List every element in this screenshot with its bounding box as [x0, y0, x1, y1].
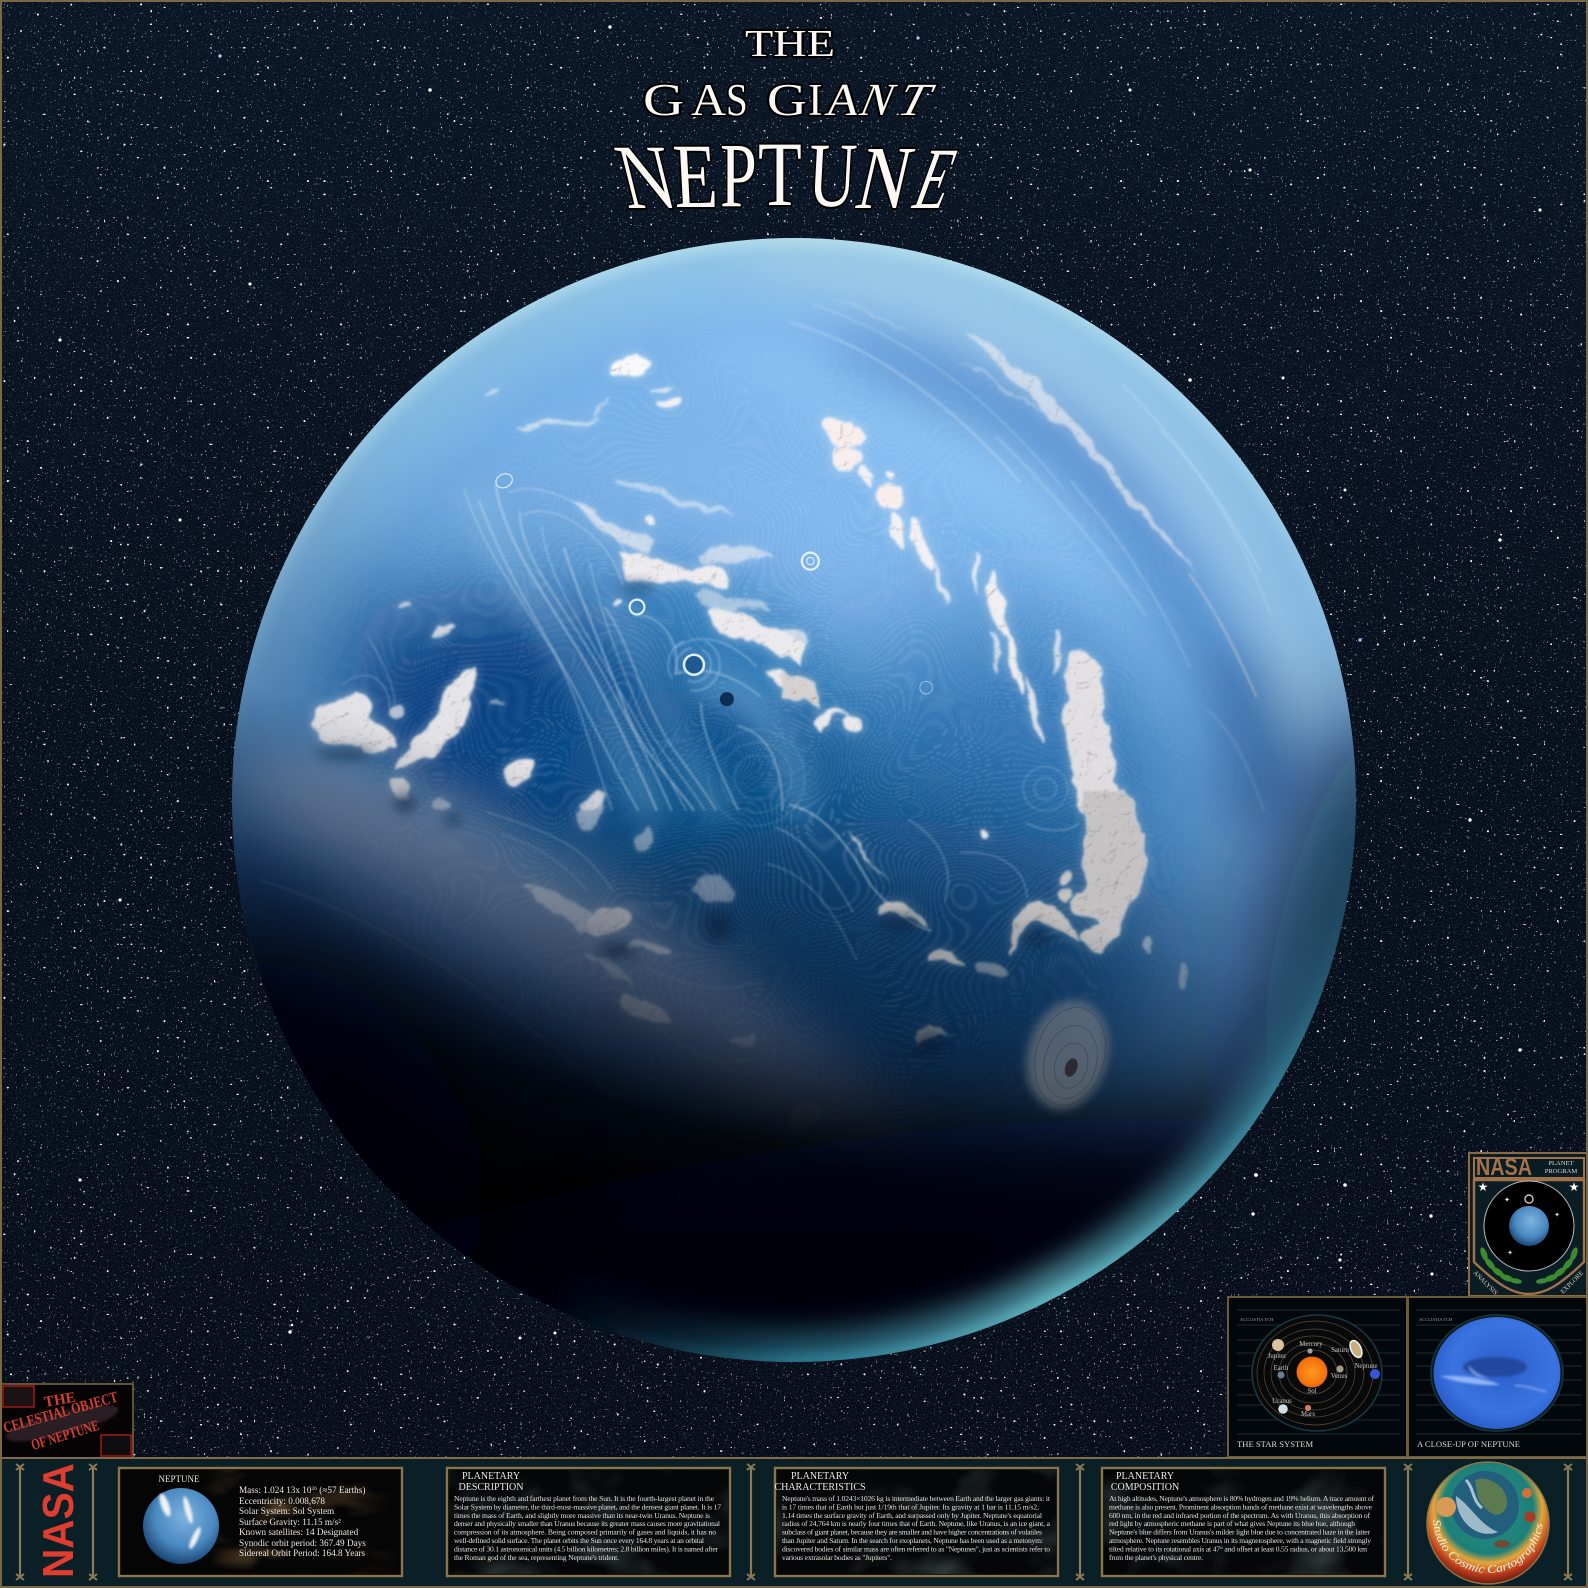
- badge header: NASA planet program: NASA: [1476, 1154, 1532, 1181]
- white cloud formations: [309, 295, 1201, 1127]
- celestial object badge: OF NEPTUNE: [29, 1418, 101, 1454]
- celestial object badge: CELESTIAL OBJECT: [2, 1389, 120, 1437]
- solar system diagram: Sol: [1307, 1388, 1317, 1395]
- Studio Cosmic Cartographics seal: [1426, 1461, 1550, 1585]
- caption: the star system: THE STAR SYSTEM: [1237, 1439, 1314, 1449]
- body text: distance of 30.1 astronomical units (4.5 billion kilometres; 2.8 billion miles). It is named after: [454, 1544, 718, 1553]
- solar system diagram: Jupiter: [1268, 1353, 1287, 1360]
- badge circle with mini planet: [1478, 1180, 1579, 1271]
- heading: COMPOSITION: [1111, 1482, 1179, 1493]
- title line: NEPTUNE: T: [758, 122, 802, 225]
- panel: the star system: [1228, 1297, 1407, 1457]
- badge circle with mini planet: ★: [1569, 1180, 1579, 1194]
- badge captions: EXPLORE: [1559, 1270, 1585, 1295]
- badge laurel: [1479, 1246, 1579, 1285]
- heading: CHARACTERISTICS: [774, 1482, 866, 1493]
- solar system diagram: [1252, 1315, 1382, 1431]
- badge circle with mini planet: ✦: [1554, 1211, 1560, 1219]
- cyclone storm lower right: [1015, 991, 1120, 1119]
- body text: [1109, 1494, 1374, 1562]
- title line: NEPTUNE: U: [806, 126, 859, 227]
- solar system diagram: Venus: [1331, 1373, 1348, 1380]
- body text: 600 nm, in the red and infrared portion of the spectrum. As with Uranus, this absorption of: [1109, 1511, 1370, 1520]
- Studio Cosmic Cartographics seal: Studio Cosmic Cartographics: [1433, 1520, 1542, 1573]
- body text: subclass of giant planet, because they are smaller and have higher concentrations of volatiles: [782, 1528, 1042, 1537]
- body text: tilted relative to its rotational axis at 47° and offset at least 0.55 radius, or about 13,500 km: [1109, 1544, 1367, 1553]
- panel: close-up of Neptune: [1408, 1297, 1587, 1457]
- facts list: Surface Gravity: 11.15 m/s²: [239, 1517, 341, 1527]
- solar system diagram: Saturn: [1331, 1347, 1349, 1354]
- heading: [1111, 1471, 1179, 1493]
- badge circle with mini planet: ✦: [1507, 1249, 1513, 1257]
- panel: close-up of Neptune: ACCLISTIA TCH: [1419, 1317, 1453, 1322]
- badge captions: [1472, 1269, 1585, 1297]
- heading: [774, 1471, 866, 1493]
- title line: NEPTUNE: N: [848, 128, 922, 228]
- panel: planetary composition: [1102, 1468, 1385, 1576]
- body text: times the mass of Earth, and slightly more massive than its near-twin Uranus. Neptune is: [454, 1511, 710, 1520]
- title line: GAS GIANT: I: [808, 74, 823, 125]
- heading: [458, 1471, 524, 1493]
- title line: GAS GIANT: A: [823, 75, 864, 126]
- badge header: NASA planet program: PROGRAM: [1545, 1168, 1577, 1175]
- planet base sphere: [232, 238, 1356, 1362]
- deep blue central storm region: [301, 255, 1200, 1197]
- grey terminator band lower left: [200, 759, 920, 1290]
- banded upper-right atmosphere: [679, 252, 1323, 822]
- caption: a close-up of Neptune: A CLOSE-UP OF NEPTUNE: [1417, 1439, 1520, 1449]
- heading: PLANETARY: [1116, 1471, 1174, 1482]
- heading: DESCRIPTION: [458, 1482, 524, 1493]
- soft light current bands: [475, 496, 800, 810]
- body text: red light by atmospheric methane is part of what gives Neptune its blue hue, although: [1109, 1519, 1355, 1528]
- solar system diagram: Earth: [1274, 1365, 1289, 1372]
- panel: planetary characteristics: [774, 1468, 1058, 1576]
- bottom information bar: [2, 1457, 1586, 1586]
- ornamental dividers: [16, 1464, 1572, 1580]
- facts list: Sidereal Orbit Period: 164.8 Years: [239, 1548, 365, 1558]
- badge circle with mini planet: ✦: [1504, 1196, 1510, 1204]
- celestial object badge: [1, 1384, 133, 1458]
- solar system diagram: Mercury: [1299, 1341, 1323, 1348]
- body text: Neptune's mass of 1.0243×1026 kg is intermediate between Earth and the larger gas giants: it: [782, 1494, 1051, 1503]
- body text: Neptune's blue differs from Uranus's milder light blue due to concentrated haze in the latter: [1109, 1528, 1370, 1537]
- close-up planet image: [1431, 1315, 1563, 1431]
- title line: GAS GIANT: S: [726, 75, 748, 126]
- atmospheric flow lines: [352, 372, 1171, 1066]
- pale upper limb glow: [232, 238, 1356, 1362]
- body text: [454, 1494, 721, 1562]
- heading: PLANETARY: [462, 1471, 520, 1482]
- facts planet thumbnail: [143, 1488, 219, 1564]
- facts list: Solar System: Sol System: [239, 1506, 334, 1516]
- NASA logo: NASA: [34, 1463, 83, 1578]
- panel: Neptune facts: NEPTUNE: [158, 1474, 200, 1484]
- solar system diagram: Mars: [1301, 1411, 1315, 1418]
- badge circle with mini planet: ★: [1478, 1180, 1488, 1194]
- body text: various extrasolar bodies as "Jupiters".: [782, 1553, 892, 1562]
- title line: GAS GIANT: T: [888, 74, 942, 125]
- body text: from the planet's physical centre.: [1109, 1553, 1203, 1562]
- body text: well-defined solid surface. The planet orbits the Sun once every 164.8 years at an orbital: [454, 1536, 704, 1545]
- body text: than Jupiter and Saturn. In the search for exoplanets, Neptune has been used as a metonym:: [782, 1536, 1043, 1545]
- title line: THE: THE: [745, 23, 835, 65]
- body text: methane is also present. Prominent absorption bands of methane exist at wavelengths above: [1109, 1502, 1373, 1511]
- title line: GAS GIANT: A: [691, 75, 726, 126]
- body text: is 17 times that of Earth but just 1/19th that of Jupiter. Its gravity at 1 bar is 11.15 m/s2,: [782, 1502, 1039, 1511]
- body text: At high altitudes, Neptune's atmosphere is 80% hydrogen and 19% helium. A trace amount of: [1109, 1494, 1374, 1503]
- facts list: Synodic orbit period: 367.49 Days: [239, 1538, 366, 1548]
- badge captions: ANALYSIS: [1472, 1269, 1499, 1297]
- panel: planetary description: [447, 1468, 730, 1576]
- title line: GAS GIANT: G: [767, 74, 807, 125]
- badge header: NASA planet program: [1474, 1154, 1584, 1181]
- title line: GAS GIANT: G: [643, 75, 684, 126]
- facts list: Known satellites: 14 Designated: [239, 1527, 359, 1537]
- panel: Neptune facts: [119, 1468, 402, 1576]
- solar system diagram: Uranus: [1272, 1398, 1292, 1405]
- facts list: [239, 1485, 366, 1558]
- title line: NEPTUNE: [607, 122, 970, 229]
- title line: NEPTUNE: N: [607, 127, 685, 229]
- shadow terminator: [134, 238, 1476, 1482]
- body text: the Roman god of the sea, representing Neptune's trident.: [454, 1553, 619, 1562]
- body text: atmosphere. Neptune resembles Uranus in its magnetosphere, with a magnetic field strongly: [1109, 1536, 1371, 1545]
- body text: 1.14 times the surface gravity of Earth, and surpassed only by Jupiter. Neptune's equatorial: [782, 1511, 1042, 1520]
- facts list: (≈57 Earths): [317, 1485, 365, 1495]
- celestial object badge: THE: [43, 1390, 77, 1411]
- body text: Neptune is the eighth and farthest planet from the Sun. It is the fourth-largest planet in the: [454, 1494, 715, 1503]
- title line: GAS GIANT: [643, 74, 942, 126]
- title line: NEPTUNE: E: [671, 125, 720, 227]
- body text: compression of its atmosphere. Being composed primarily of gases and liquids, it has no: [454, 1528, 716, 1537]
- title line: NEPTUNE: E: [902, 131, 970, 228]
- planet Neptune: [232, 238, 1356, 1362]
- body text: [782, 1494, 1051, 1562]
- facts list: Mass: 1.024 13x 10: [239, 1485, 311, 1495]
- swirl strokes: [342, 485, 1079, 1073]
- facts list: Eccentricity: 0.008,678: [239, 1496, 325, 1506]
- heading: PLANETARY: [791, 1471, 849, 1482]
- title line: NEPTUNE: P: [720, 126, 757, 227]
- seal earth: [1451, 1471, 1519, 1539]
- title line: GAS GIANT: N: [853, 74, 904, 125]
- cloud under-shadows: [316, 583, 1053, 1056]
- body text: Solar System by diameter, the third-most-massive planet, and the densest giant planet. It is 17: [454, 1502, 721, 1511]
- title: [607, 23, 970, 229]
- badge header: NASA planet program: PLANET: [1548, 1160, 1574, 1167]
- body text: radius of 24,764 km is nearly four times that of Earth. Neptune, like Uranus, is an ice giant, a: [782, 1519, 1051, 1528]
- mission patch badge: [1469, 1153, 1588, 1297]
- badge shield outline: [1474, 1180, 1584, 1294]
- facts list: 26: [311, 1486, 317, 1492]
- solar system diagram: Neptune: [1354, 1363, 1378, 1370]
- body text: denser and physically smaller than Uranus because its greater mass causes more gravitational: [454, 1519, 720, 1528]
- panel: the star system: ACCLISTIA TCH: [1240, 1317, 1274, 1322]
- teal crescent rim: [560, 800, 1356, 1362]
- body text: discovered bodies of similar mass are often referred to as "Neptunes", just as scientists refer to: [782, 1544, 1050, 1553]
- vortex rings: [494, 471, 932, 706]
